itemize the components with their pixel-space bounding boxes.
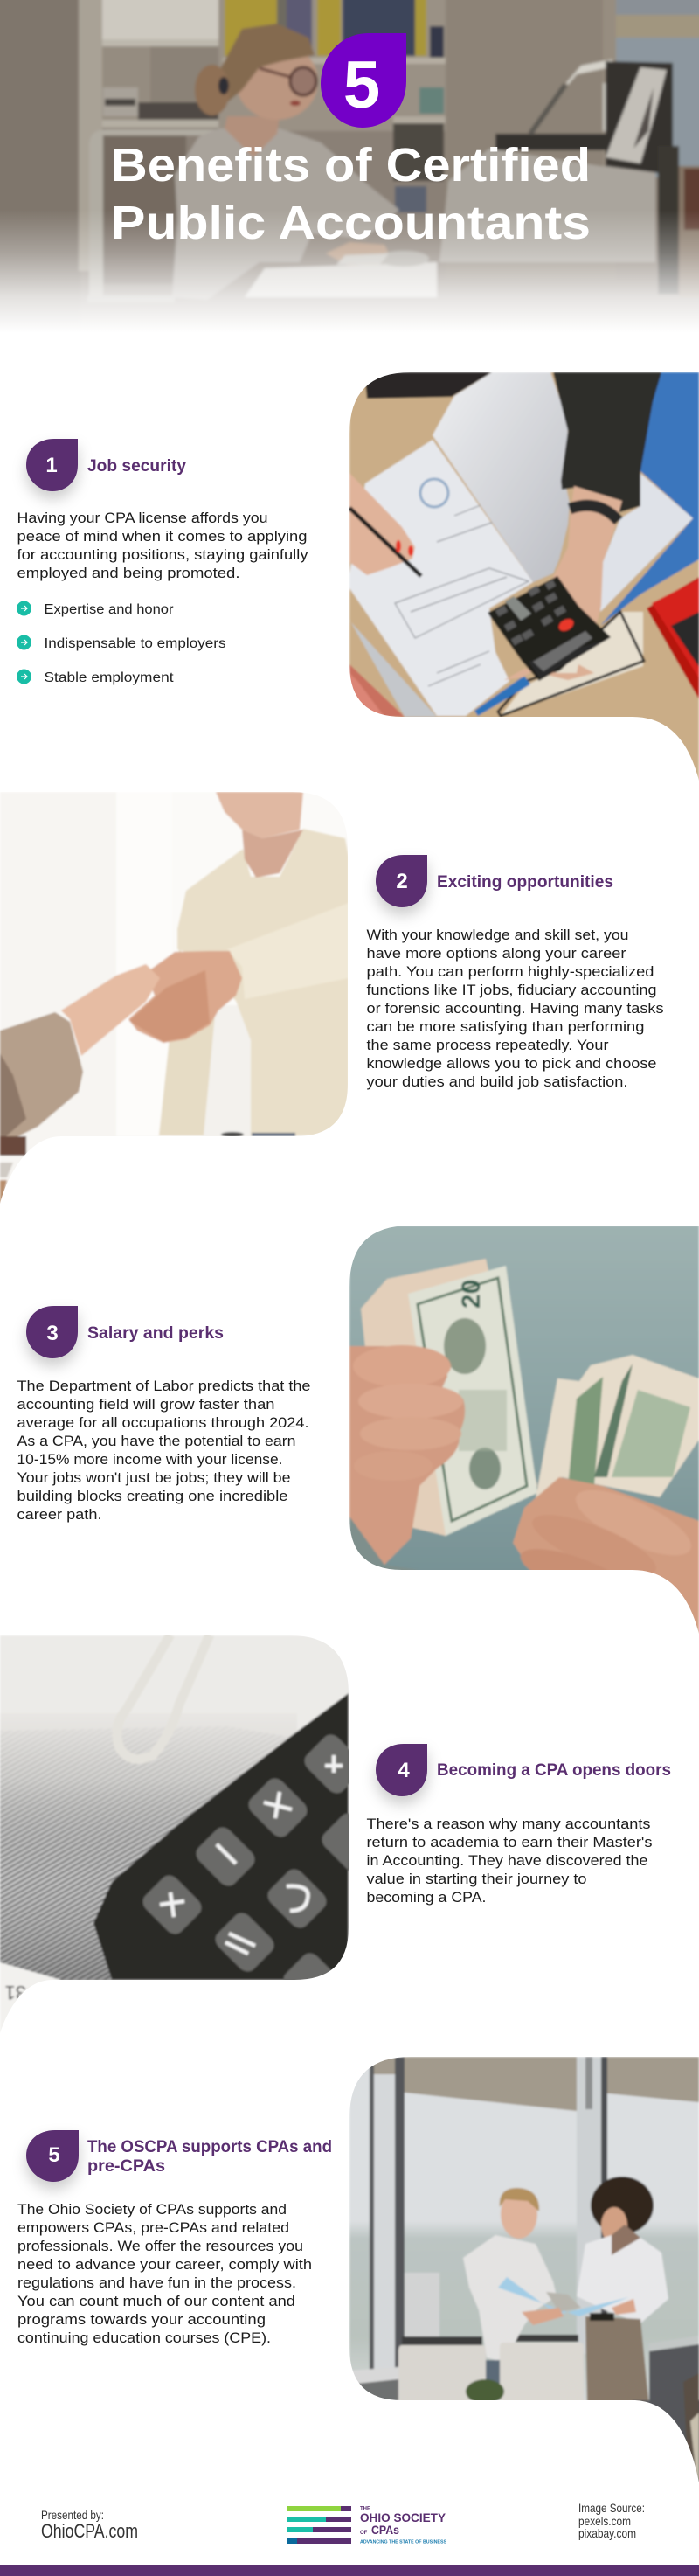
body text: the same process repeatedly. Your: [367, 1038, 609, 1053]
body text: regulations and have fun in the process.: [17, 2275, 296, 2291]
body text: employed and being promoted.: [17, 566, 239, 581]
bullet list: Expertise and honor: [44, 602, 173, 617]
body text: average for all occupations through 2024.: [17, 1415, 309, 1431]
panel: photo, hands holding dollar bills: 20: [457, 1280, 486, 1309]
panel: photo, two colleagues at an office window: [350, 2057, 699, 2488]
body text: [17, 510, 308, 581]
body text: The Department of Labor predicts that the: [17, 1378, 311, 1394]
panel: photo, calculator keys and paper clip: [0, 1635, 349, 2031]
body text: your duties and build job satisfaction.: [367, 1074, 627, 1090]
header badge with number 5: 5: [343, 48, 380, 122]
footer bar: [0, 2565, 699, 2576]
footer: image source: pixabay.com: [578, 2526, 636, 2540]
panel: section 4 text: [367, 1744, 671, 1906]
body text: empowers CPAs, pre-CPAs and related: [17, 2220, 289, 2236]
panel: section 3 text: [17, 1306, 311, 1523]
body text: functions like IT jobs, fiduciary accounting: [367, 982, 657, 998]
heading: Becoming a CPA opens doors: [437, 1761, 671, 1780]
body text: or forensic accounting. Having many tasks: [367, 1001, 664, 1017]
badge 4: 4: [398, 1759, 410, 1782]
footer: presented by: [41, 2508, 138, 2542]
body text: building blocks creating one incredible: [17, 1489, 288, 1504]
body text: career path.: [17, 1507, 101, 1523]
footer: logo: OHIO SOCIETY: [360, 2510, 446, 2524]
title: Public Accountants: [111, 197, 591, 249]
panel: section 5 text: [17, 2130, 332, 2346]
panel: photo, hands holding dollar bills: [350, 1226, 699, 1639]
badge 3: 3: [46, 1322, 59, 1345]
panel: photo, hands with calculator and documents: [350, 372, 699, 783]
body text: knowledge allows you to pick and choose: [367, 1056, 657, 1072]
footer: image source: pexels.com: [578, 2514, 631, 2528]
badge 2: 2: [396, 870, 408, 893]
body text: value in starting their journey to: [367, 1871, 587, 1887]
heading: The OSCPA supports CPAs and: [87, 2138, 332, 2156]
body text: The Ohio Society of CPAs supports and: [17, 2202, 287, 2218]
footer: logo: THE: [360, 2507, 370, 2512]
body text: You can count much of our content and: [17, 2294, 295, 2309]
footer: logo: [287, 2506, 446, 2545]
body text: [367, 927, 664, 1090]
panel: photo, calculator keys and paper clip: 31: [5, 1982, 26, 2003]
heading: pre-CPAs: [87, 2157, 165, 2176]
panel: header photo: [0, 0, 699, 358]
body text: programs towards your accounting: [17, 2312, 266, 2328]
body text: There's a reason why many accountants: [367, 1816, 650, 1832]
bullet list: [17, 601, 226, 685]
heading: Salary and perks: [87, 1324, 224, 1343]
body text: for accounting positions, staying gainfully: [17, 547, 308, 563]
body text: 10-15% more income with your license.: [17, 1452, 283, 1468]
footer: logo: OF: [360, 2531, 368, 2536]
badge 1: [26, 439, 78, 491]
body text: accounting field will grow faster than: [17, 1397, 274, 1413]
title: Benefits of Certified: [111, 139, 591, 191]
badge 4: [376, 1744, 427, 1796]
title: [111, 139, 591, 249]
heading: Exciting opportunities: [437, 873, 613, 892]
body text: becoming a CPA.: [367, 1890, 486, 1906]
badge 3: [26, 1306, 78, 1358]
footer: logo: CPAs: [371, 2523, 399, 2537]
body text: peace of mind when it comes to applying: [17, 529, 308, 545]
bullet list: Stable employment: [44, 670, 174, 685]
body text: [17, 2202, 312, 2346]
body text: continuing education courses (CPE).: [17, 2330, 271, 2346]
body text: can be more satisfying than performing: [367, 1019, 645, 1035]
body text: in Accounting. They have discovered the: [367, 1853, 648, 1869]
heading: Job security: [87, 457, 186, 476]
body text: return to academia to earn their Master's: [367, 1835, 652, 1850]
footer: logo: ADVANCING THE STATE OF BUSINESS: [360, 2540, 446, 2545]
panel: section 1 text: [17, 439, 308, 685]
panel: photo, handshake: [0, 792, 350, 1212]
body text: professionals. We offer the resources you: [17, 2239, 303, 2254]
badge 2: [376, 855, 427, 907]
heading: [87, 2138, 332, 2176]
body text: [367, 1816, 652, 1906]
badge 5: [26, 2130, 79, 2182]
header badge with number 5: [321, 33, 406, 128]
badge 5: 5: [48, 2143, 60, 2167]
body text: As a CPA, you have the potential to earn: [17, 1434, 295, 1449]
body text: [17, 1378, 311, 1523]
body text: have more options along your career: [367, 946, 626, 962]
footer: presented by: OhioCPA.com: [41, 2520, 138, 2542]
body text: need to advance your career, comply with: [17, 2257, 312, 2273]
badge 1: 1: [45, 454, 58, 477]
panel: section 2 text: [367, 855, 664, 1090]
footer: image source: Image Source:: [578, 2501, 645, 2515]
body text: path. You can perform highly-specialized: [367, 964, 654, 980]
bullet list: Indispensable to employers: [44, 636, 226, 651]
footer: presented by: Presented by:: [41, 2508, 104, 2522]
body text: Having your CPA license affords you: [17, 510, 267, 526]
body text: With your knowledge and skill set, you: [367, 927, 629, 943]
footer: image source: [578, 2501, 645, 2540]
body text: Your jobs won't just be jobs; they will be: [17, 1470, 290, 1486]
